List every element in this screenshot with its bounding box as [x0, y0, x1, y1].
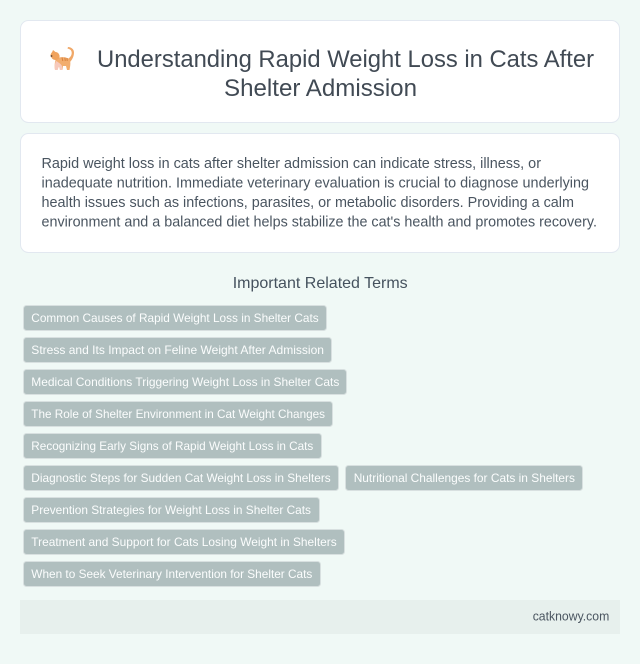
tag: treatment and support: Treatment and Support for Cats Losing Weight in Shelters [31, 535, 337, 549]
tag: early signs: Recognizing Early Signs of Rapid Weight Loss in Cats [31, 439, 313, 453]
tag: shelter environment [24, 402, 332, 426]
tag: veterinary intervention [24, 562, 320, 586]
tag: prevention strategies: Prevention Strategies for Weight Loss in Shelter Cats [31, 503, 311, 517]
text block: summary paragraph [42, 156, 597, 230]
tag: common causes [24, 306, 326, 330]
tag: stress [24, 338, 332, 362]
tag: diagnostic steps: Diagnostic Steps for Sudden Cat Weight Loss in Shelters [31, 471, 331, 485]
title: Shelter Admission [224, 75, 417, 102]
heading: related terms: Important Related Terms [233, 275, 408, 292]
title: Understanding Rapid Weight Loss in Cats After [97, 46, 594, 73]
footer [20, 600, 620, 634]
panel: summary card [20, 134, 620, 252]
related terms list [24, 306, 582, 586]
text block: summary paragraph: health issues such as infections, parasites, or metabolic disorders. Providing a calm [42, 195, 574, 211]
panel: title card [20, 20, 620, 122]
text block: summary paragraph: environment and a balanced diet helps stabilize the cat's health and promotes recovery. [42, 214, 597, 230]
tag: stress: Stress and Its Impact on Feline Weight After Admission [31, 343, 324, 357]
text block: summary paragraph: Rapid weight loss in cats after shelter admission can indicate stress, illness, or [42, 156, 541, 172]
tag: nutritional challenges: Nutritional Challenges for Cats in Shelters [354, 471, 575, 485]
tag: common causes: Common Causes of Rapid Weight Loss in Shelter Cats [31, 311, 319, 325]
tag: medical conditions [24, 370, 346, 394]
tag: early signs [24, 434, 322, 458]
tag: prevention strategies [24, 498, 320, 522]
tag: veterinary intervention: When to Seek Veterinary Intervention for Shelter Cats [31, 567, 312, 581]
tag: diagnostic steps [24, 466, 338, 490]
icon: cat [50, 47, 74, 70]
tag: medical conditions: Medical Conditions Triggering Weight Loss in Shelter Cats [31, 375, 339, 389]
tag: shelter environment: The Role of Shelter Environment in Cat Weight Changes [31, 407, 325, 421]
title [97, 46, 594, 102]
text block: summary paragraph: inadequate nutrition. Immediate veterinary evaluation is crucial to diagnose underlying [42, 176, 589, 192]
tag: nutritional challenges [346, 466, 582, 490]
tag: treatment and support [24, 530, 344, 554]
footer: catknowy.com [533, 609, 609, 624]
